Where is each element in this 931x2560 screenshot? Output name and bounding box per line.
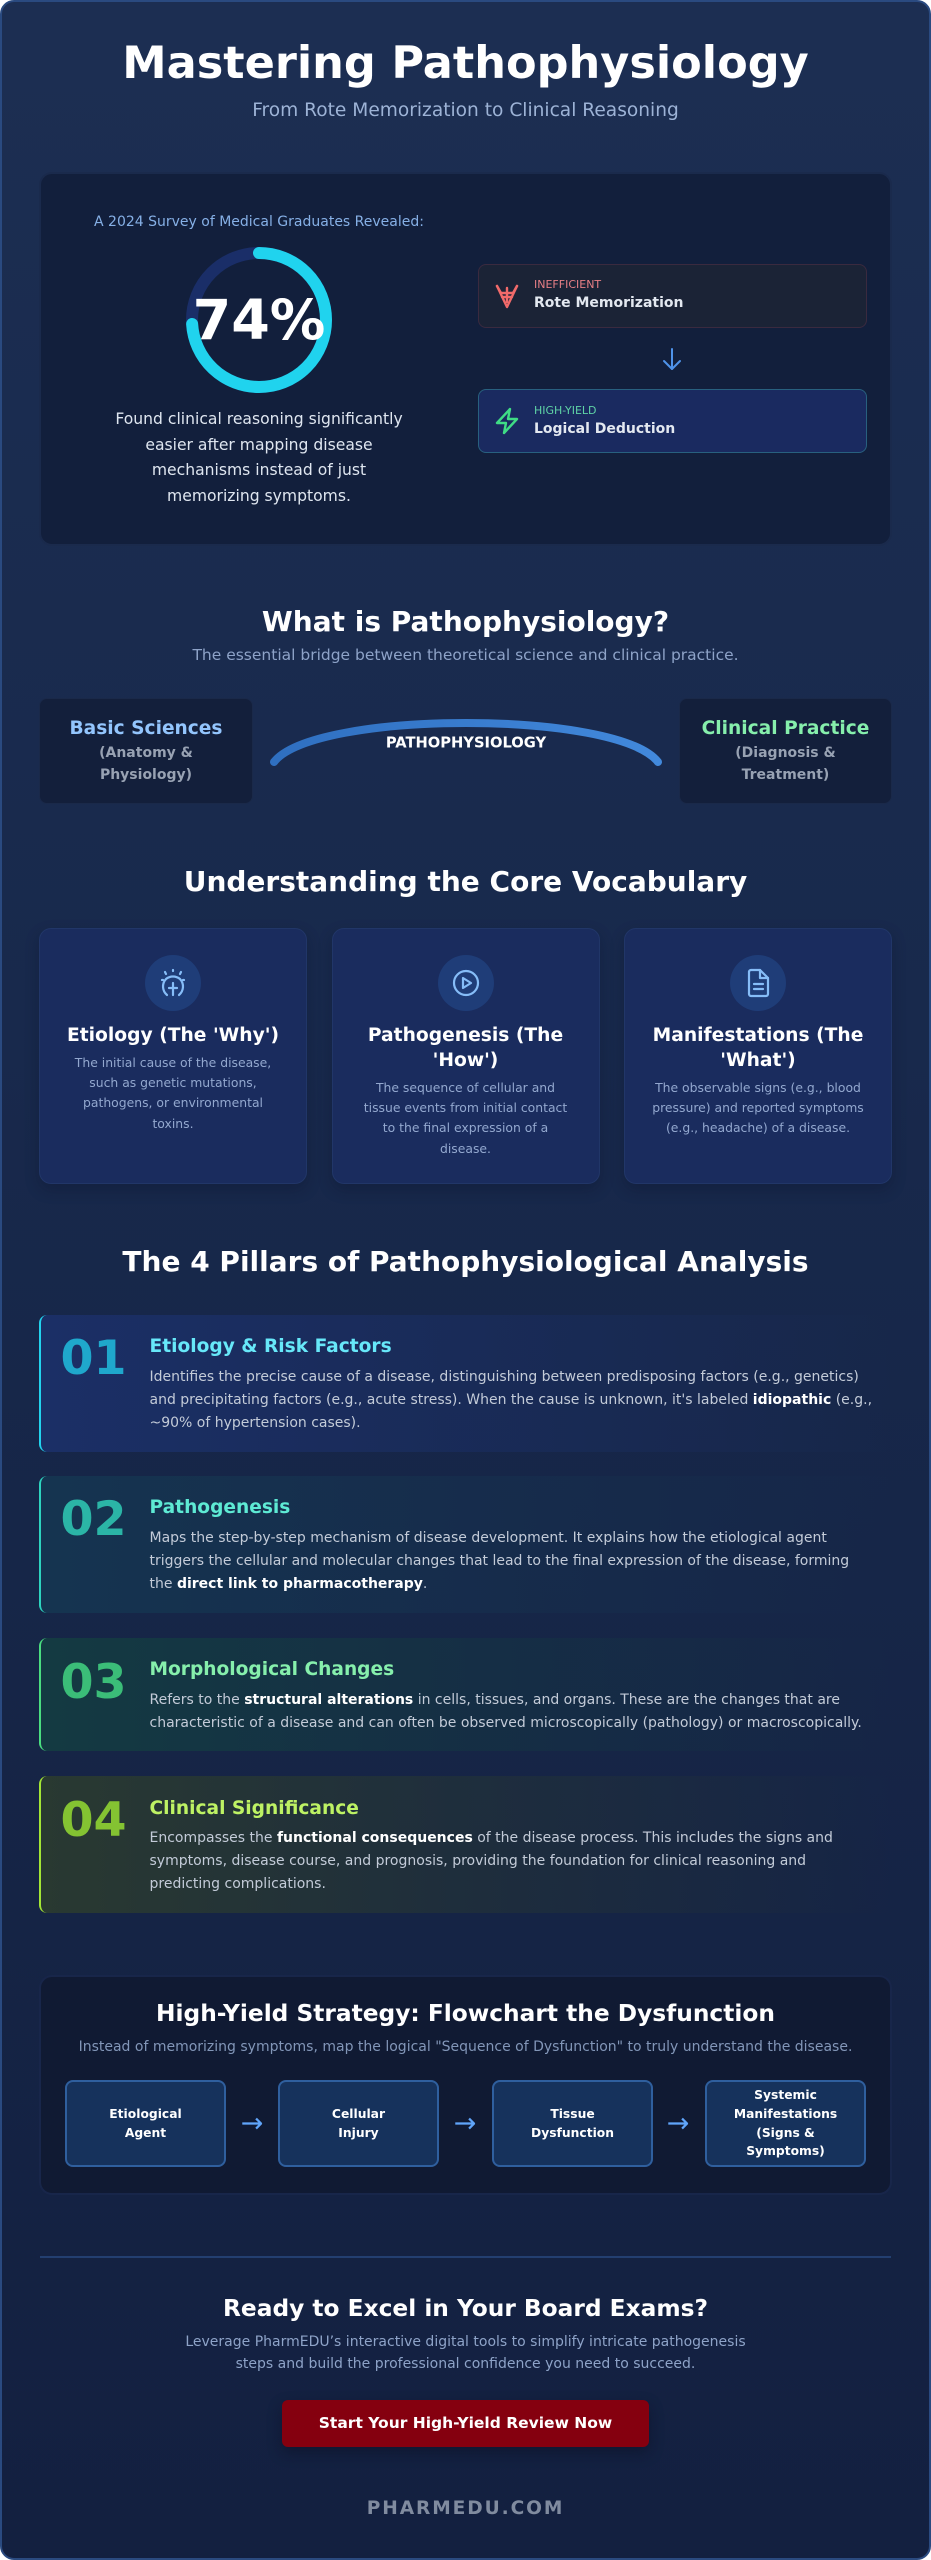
- arrow: down: [663, 348, 681, 370]
- flow step 2: [278, 2080, 439, 2167]
- survey finding text: memorizing symptoms.: [167, 487, 351, 505]
- number: 03: [60, 1655, 127, 1710]
- number: 01: [60, 1331, 127, 1386]
- pillar text: [150, 1692, 862, 1731]
- card description: tissue events from initial contact: [364, 1100, 567, 1115]
- card title: Pathogenesis (The: [368, 1025, 563, 1046]
- footer brand: PHARMEDU.COM: [367, 2498, 564, 2519]
- label: logical deduction: Logical Deduction: [534, 420, 675, 436]
- card description: to the final expression of a: [383, 1120, 548, 1135]
- panel: flowchart strategy: [40, 1976, 891, 2194]
- box: basic sciences: [39, 698, 253, 804]
- heading: four pillars: The 4 Pillars of Pathophysiological Analysis: [122, 1245, 809, 1278]
- card title: [368, 1025, 563, 1071]
- number: 02: [60, 1492, 127, 1547]
- survey finding text: [115, 410, 403, 505]
- panel heading: High-Yield Strategy: Flowchart the Dysfunction: [156, 2000, 775, 2027]
- card: rote memorization: [478, 264, 867, 328]
- panel: survey statistic: [40, 173, 891, 545]
- box: clinical practice: [679, 698, 892, 804]
- pillar 03: [39, 1638, 892, 1751]
- flow step 1: Agent: [125, 2126, 166, 2140]
- box title: Clinical Practice: [702, 718, 869, 739]
- heading: core vocabulary: Understanding the Core Vocabulary: [184, 865, 747, 898]
- card: etiology: [39, 928, 307, 1184]
- button: [282, 2400, 649, 2447]
- pillar text: Identifies the precise cause of a disease, distinguishing between predisposing factors (e.g., genetics): [150, 1369, 859, 1385]
- card title: Etiology (The 'Why'): [67, 1025, 279, 1046]
- card: manifestations: [624, 928, 892, 1184]
- box note: (Diagnosis &: [735, 745, 836, 761]
- call to action text: Leverage PharmEDU’s interactive digital tools to simplify intricate pathogenesis: [185, 2334, 746, 2350]
- arrow 1: →: [241, 2108, 263, 2139]
- survey finding text: Found clinical reasoning significantly: [115, 410, 403, 428]
- flow step 3: [492, 2080, 653, 2167]
- pillar text: triggers the cellular and molecular changes that lead to the final expression of the disease, forming: [150, 1553, 849, 1569]
- subtitle: From Rote Memorization to Clinical Reasoning: [252, 100, 679, 121]
- number: 04: [60, 1793, 127, 1848]
- pillar text: [150, 1369, 872, 1431]
- icon: etiology: [145, 955, 201, 1011]
- box note: [99, 745, 193, 783]
- pillar title: Pathogenesis: [150, 1497, 290, 1518]
- card title: Manifestations (The: [653, 1025, 863, 1046]
- call to action text: steps and build the professional confidence you need to succeed.: [236, 2356, 695, 2372]
- flow step 3: Dysfunction: [531, 2126, 614, 2140]
- box note: [735, 745, 836, 783]
- divider: [40, 2256, 891, 2258]
- card description: (e.g., headache) of a disease.: [666, 1120, 850, 1135]
- card description: pathogens, or environmental: [83, 1095, 263, 1110]
- card description: toxins.: [152, 1116, 194, 1131]
- card description: such as genetic mutations,: [89, 1075, 257, 1090]
- label: high-yield: HIGH-YIELD: [534, 404, 596, 416]
- card description: [652, 1080, 864, 1135]
- icon: play circle: [438, 955, 494, 1011]
- pillar text: symptoms, disease course, and prognosis, providing the foundation for clinical reasoning and: [150, 1853, 806, 1869]
- pillar title: Etiology & Risk Factors: [150, 1336, 392, 1357]
- flow step 4: Symptoms): [746, 2144, 825, 2158]
- flow step 1: Etiological: [109, 2107, 182, 2121]
- flow step 2: Injury: [338, 2126, 379, 2140]
- title: Mastering Pathophysiology: [122, 37, 809, 89]
- box title: Basic Sciences: [70, 718, 222, 739]
- call to action text: [185, 2334, 746, 2372]
- card title: 'What'): [720, 1050, 796, 1071]
- donut chart: 74%: [186, 247, 332, 393]
- pillar text: predicting complications.: [150, 1876, 326, 1892]
- card description: The initial cause of the disease,: [75, 1055, 271, 1070]
- flow step 4: Systemic: [754, 2088, 817, 2102]
- bridge arc with label: PATHOPHYSIOLOGY: [386, 734, 547, 752]
- pillar text: ~90% of hypertension cases).: [150, 1415, 361, 1431]
- arrow 3: →: [667, 2108, 689, 2139]
- pillar text: the direct link to pharmacotherapy.: [150, 1576, 427, 1592]
- card title: 'How'): [433, 1050, 498, 1071]
- flow step 4: Manifestations: [734, 2107, 837, 2121]
- pillar text: and precipitating factors (e.g., acute stress). When the cause is unknown, it's labeled idiopathic (e.g.,: [150, 1392, 872, 1408]
- survey finding text: mechanisms instead of just: [152, 461, 366, 479]
- label: rote memorization: Rote Memorization: [534, 295, 683, 311]
- section subtitle: The essential bridge between theoretical science and clinical practice.: [192, 646, 739, 664]
- card description: [364, 1080, 567, 1156]
- icon: lightning bolt: [496, 408, 518, 434]
- box note: (Anatomy &: [99, 745, 193, 761]
- bridge arc with label: [270, 719, 662, 766]
- pillar text: [150, 1830, 833, 1892]
- pillar 04: [39, 1776, 892, 1913]
- box note: Treatment): [742, 767, 829, 783]
- pillar text: Encompasses the functional consequences of the disease process. This includes the signs and: [150, 1830, 833, 1846]
- heading: call to action: Ready to Excel in Your Board Exams?: [223, 2295, 708, 2322]
- card description: pressure) and reported symptoms: [652, 1100, 864, 1115]
- card description: disease.: [440, 1141, 491, 1156]
- heading: what is pathophysiology: What is Pathophysiology?: [262, 605, 669, 638]
- flow step 3: Tissue: [550, 2107, 595, 2121]
- box note: Physiology): [100, 767, 192, 783]
- big percentage: 74%: [193, 288, 325, 353]
- pillar text: [150, 1530, 849, 1592]
- card: pathogenesis: [332, 928, 600, 1184]
- pillar title: Morphological Changes: [150, 1659, 394, 1680]
- pillar 02: [39, 1476, 892, 1613]
- flow step 1: [65, 2080, 226, 2167]
- label: inefficient: INEFFICIENT: [534, 278, 601, 291]
- icon: document: [730, 955, 786, 1011]
- pillar text: characteristic of a disease and can often be observed microscopically (pathology) or macroscopically.: [150, 1715, 862, 1731]
- pillar 01: [39, 1315, 892, 1452]
- flow step 4: [705, 2080, 866, 2167]
- survey label: A 2024 Survey of Medical Graduates Revealed:: [94, 214, 424, 230]
- card description: The observable signs (e.g., blood: [655, 1080, 861, 1095]
- icon: inefficient: [496, 284, 518, 308]
- card title: [653, 1025, 863, 1071]
- survey finding text: easier after mapping disease: [145, 436, 373, 454]
- arrow 2: →: [454, 2108, 476, 2139]
- panel subtitle: Instead of memorizing symptoms, map the logical "Sequence of Dysfunction" to truly understand the disease.: [79, 2039, 852, 2055]
- card description: [74, 1055, 271, 1131]
- button: Start Your High-Yield Review Now: [319, 2414, 612, 2432]
- pillar text: Maps the step-by-step mechanism of disease development. It explains how the etiological agent: [150, 1530, 827, 1546]
- flow step 2: Cellular: [332, 2107, 385, 2121]
- flow step 4: (Signs &: [756, 2126, 815, 2140]
- card: logical deduction: [478, 389, 867, 453]
- card description: The sequence of cellular and: [376, 1080, 555, 1095]
- pillar title: Clinical Significance: [150, 1798, 359, 1819]
- pillar text: Refers to the structural alterations in cells, tissues, and organs. These are the changes that are: [150, 1692, 840, 1708]
